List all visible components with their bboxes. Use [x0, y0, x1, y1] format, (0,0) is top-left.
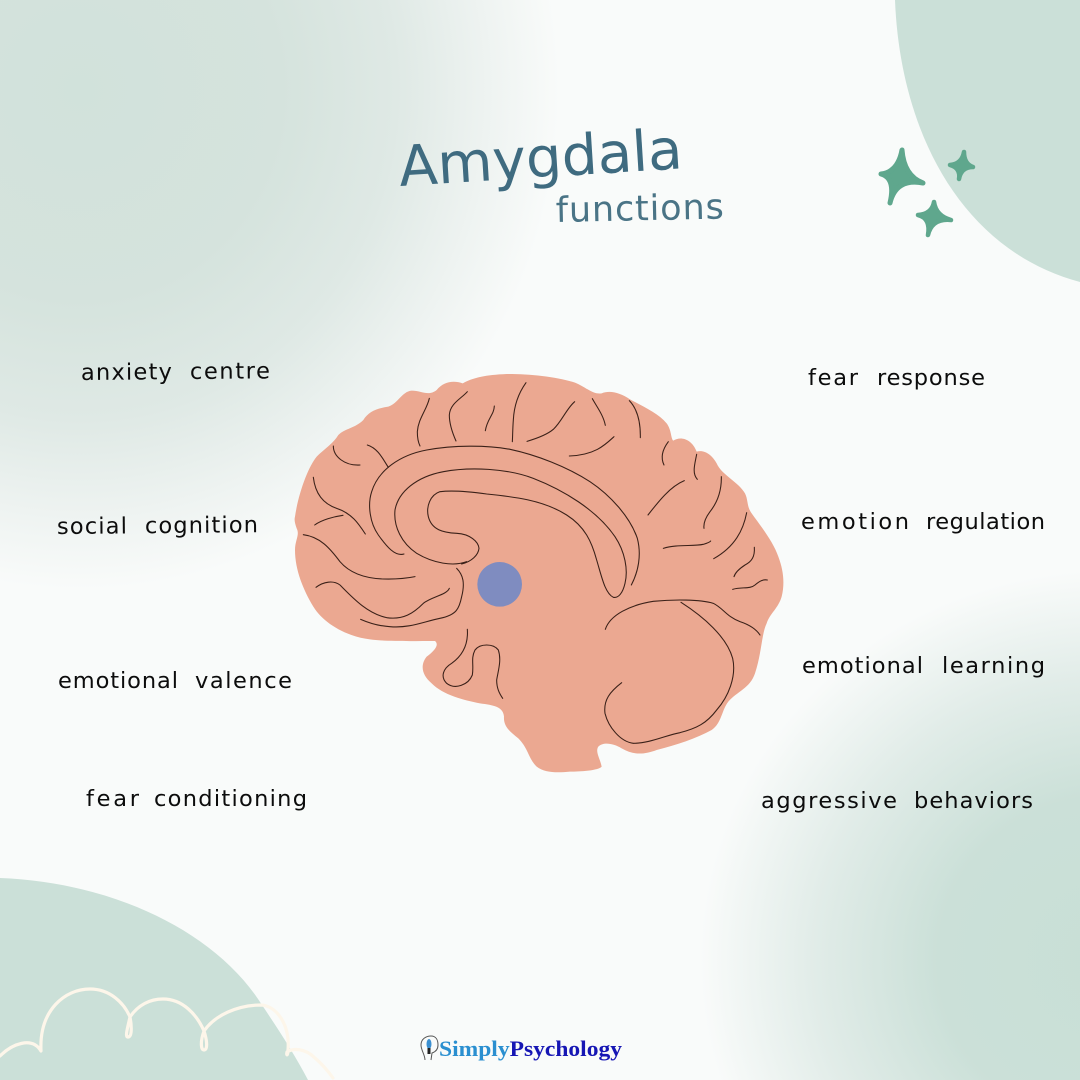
label: emotional learning: learning	[942, 653, 1045, 679]
label: fear conditioning: conditioning	[154, 786, 307, 812]
icon: sparkles	[881, 150, 973, 235]
label: aggressive behaviors: behaviors	[914, 788, 1033, 814]
label: emotion regulation: emotion	[801, 509, 909, 535]
gradient blob: bottom right	[700, 570, 1080, 1080]
label: emotional learning: emotional	[802, 653, 923, 679]
sulci lines	[303, 383, 767, 743]
label: emotional valence: valence	[195, 668, 292, 694]
sparkle: large	[881, 150, 923, 203]
sparkle: small lower	[918, 202, 951, 235]
subheading: functions: functions	[555, 187, 724, 231]
label: social cognition: social	[57, 513, 127, 540]
corner shape: bottom left	[0, 878, 308, 1080]
label: fear response: fear	[808, 365, 859, 391]
label: aggressive behaviors: aggressive	[761, 788, 897, 814]
label: anxiety centre: centre	[190, 358, 270, 385]
label: emotion regulation: regulation	[926, 509, 1045, 535]
logo wordmark: SimplyPsychology	[439, 1036, 622, 1061]
brain illustration	[295, 374, 783, 772]
cloud line decoration	[0, 989, 333, 1078]
amygdala marker	[477, 562, 522, 607]
label: fear response: response	[877, 365, 985, 391]
logo: Simply Psychology	[421, 1036, 622, 1061]
sparkle: small upper	[950, 152, 973, 179]
label: fear conditioning: fear	[86, 786, 140, 812]
title	[397, 117, 724, 231]
brain silhouette	[295, 374, 783, 772]
label: anxiety centre: anxiety	[81, 359, 172, 386]
label: emotional valence: emotional	[58, 668, 178, 694]
heading: Amygdala: Amygdala	[397, 117, 684, 200]
corner shape: top right	[895, 0, 1080, 282]
gradient blob: top left	[0, 0, 560, 590]
label: social cognition: cognition	[145, 512, 258, 539]
logo icon: head	[421, 1036, 438, 1060]
